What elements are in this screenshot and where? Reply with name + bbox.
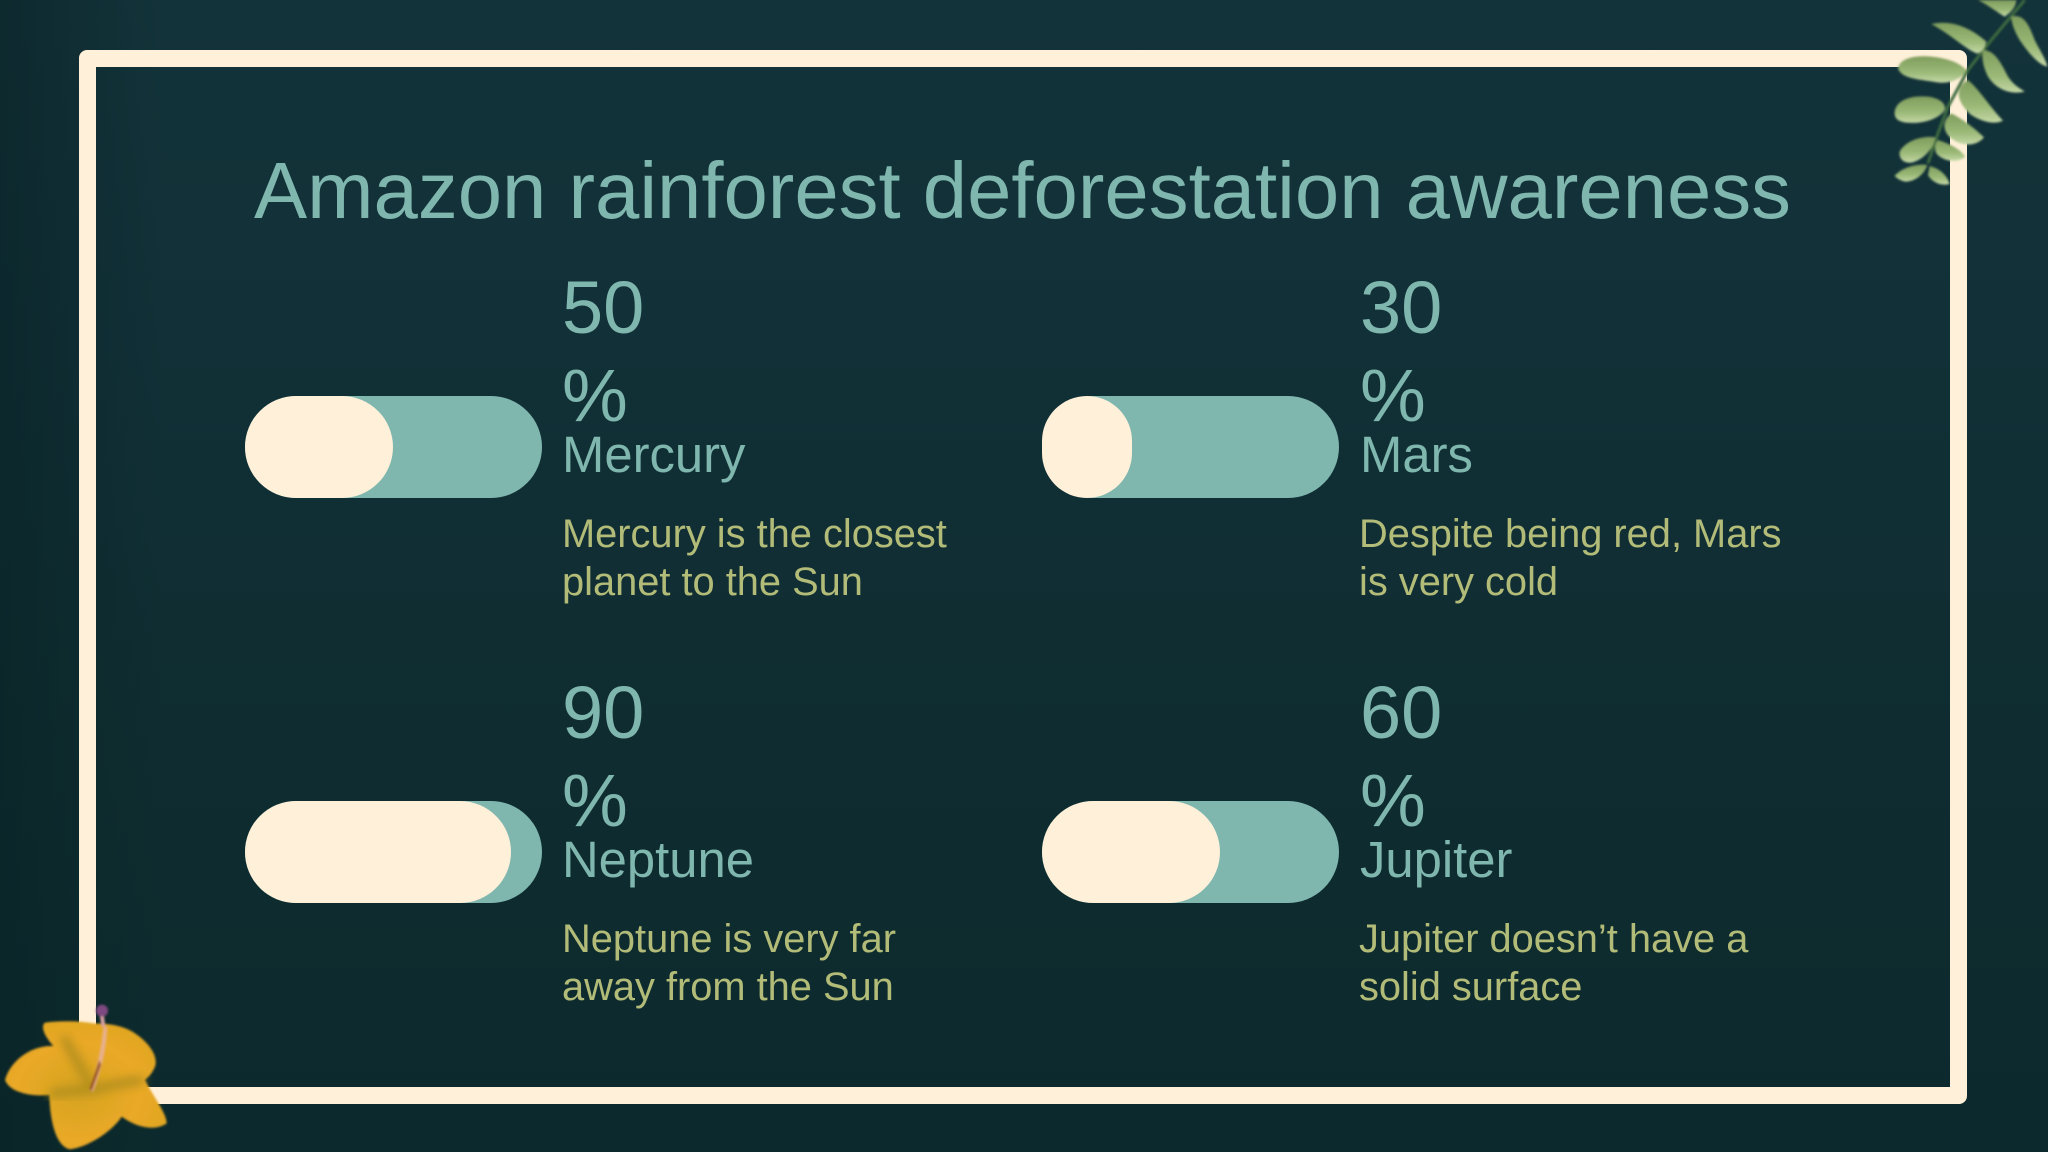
heading: Mars: Mars — [1360, 426, 1473, 483]
value: Mars: 30 — [1360, 266, 1442, 349]
value: Mars — [1360, 266, 1442, 437]
toggle: Neptune 90% — [245, 801, 542, 903]
text: Mercury: Mercury is the closest — [562, 512, 947, 556]
text: Jupiter: solid surface — [1359, 965, 1582, 1009]
value: Mars: % — [1360, 354, 1426, 437]
text: Mars: is very cold — [1359, 560, 1558, 604]
text: Jupiter: Jupiter doesn’t have a — [1359, 917, 1748, 961]
value: Jupiter: 60 — [1360, 671, 1442, 754]
text: Jupiter — [1359, 917, 1748, 1009]
heading: Mercury: Mercury — [562, 426, 745, 483]
toggle: Mars 30% — [1042, 396, 1339, 498]
icon: leaves — [1893, 0, 2048, 186]
value: Jupiter — [1360, 671, 1442, 842]
title: Amazon rainforest deforestation awareness — [254, 146, 1791, 235]
flower stamen — [89, 1005, 108, 1092]
value: Mercury: % — [562, 354, 628, 437]
heading: Neptune: Neptune — [562, 831, 754, 888]
text: Mercury: planet to the Sun — [562, 560, 863, 604]
panel: Neptune — [245, 671, 896, 1009]
value: Mercury: 50 — [562, 266, 644, 349]
text: Neptune: Neptune is very far — [562, 917, 896, 961]
panel: Mercury — [245, 266, 947, 604]
text: Mars — [1359, 512, 1782, 604]
value: Jupiter: % — [1360, 759, 1426, 842]
value: Mercury — [562, 266, 644, 437]
text: Neptune — [562, 917, 896, 1009]
text: Mercury — [562, 512, 947, 604]
icon: flower — [4, 1003, 168, 1151]
heading: Jupiter: Jupiter — [1360, 831, 1512, 888]
flower shading — [50, 1037, 143, 1095]
value: Neptune: % — [562, 759, 628, 842]
text: Neptune: away from the Sun — [562, 965, 894, 1009]
panel: Mars — [1042, 266, 1782, 604]
text: Mars: Despite being red, Mars — [1359, 512, 1782, 556]
toggle: Mercury 50% — [245, 396, 542, 498]
value: Neptune: 90 — [562, 671, 644, 754]
toggle: Jupiter 60% — [1042, 801, 1339, 903]
value: Neptune — [562, 671, 644, 842]
panel: Jupiter — [1042, 671, 1748, 1009]
